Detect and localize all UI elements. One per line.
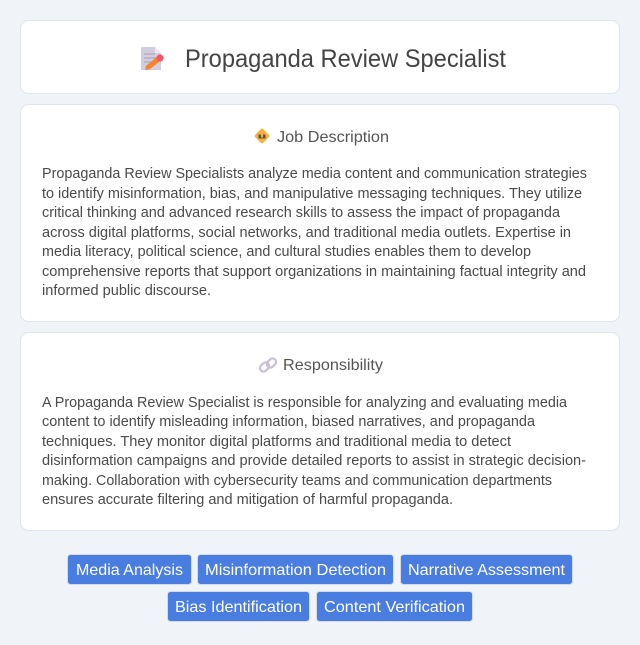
- text: job description body: Propaganda Review Specialists analyze media content and communication strategies: [42, 166, 587, 182]
- tag: narrative assessment: [400, 554, 572, 584]
- tag: content verification: Content Verification: [324, 599, 465, 616]
- text: responsibility body: techniques. They monitor digital platforms and traditional media to detect: [42, 434, 511, 450]
- text: job description body: [42, 166, 587, 299]
- tag: bias identification: [168, 592, 310, 622]
- tag: misinformation detection: Misinformation Detection: [205, 562, 386, 579]
- icon: document with pencil: [141, 47, 164, 70]
- skill tags: [68, 554, 572, 622]
- heading: responsibility: Responsibility: [283, 357, 383, 374]
- text: job description body: critical thinking and advanced research skills to assess the impact of propaganda: [42, 205, 560, 221]
- text: job description body: across digital platforms, social networks, and traditional media outlets. Expertise in: [42, 225, 571, 241]
- tag: media analysis: Media Analysis: [76, 562, 183, 579]
- text: responsibility body: A Propaganda Review Specialist is responsible for analyzing and evaluating media: [42, 395, 567, 411]
- text: job description body: media literacy, political science, and cultural studies enables them to develop: [42, 244, 531, 260]
- tag: bias identification: Bias Identification: [175, 599, 302, 616]
- text: job description body: informed public discourse.: [42, 283, 211, 299]
- text: responsibility body: [42, 395, 586, 508]
- tag: media analysis: [68, 554, 192, 584]
- heading: job description: Job Description: [277, 129, 389, 146]
- text: job description body: comprehensive reports that support organizations in maintaining factual integrity and: [42, 264, 586, 280]
- text: responsibility body: disinformation campaigns and provide detailed reports to assist in strategic decision-: [42, 453, 586, 469]
- tag: misinformation detection: [198, 554, 394, 584]
- panel: job description: [20, 104, 620, 322]
- panel: responsibility: [20, 332, 620, 530]
- tag: narrative assessment: Narrative Assessment: [408, 562, 566, 579]
- tag: content verification: [316, 592, 472, 622]
- panel: title: [20, 20, 620, 94]
- text: job description body: to identify misinformation, bias, and manipulative messaging techniques. They utilize: [42, 186, 582, 202]
- icon: chain link: [258, 357, 278, 373]
- text: responsibility body: making. Collaboration with cybersecurity teams and communication departments: [42, 473, 552, 489]
- title text: Propaganda Review Specialist: [185, 45, 506, 73]
- text: responsibility body: content to identify misleading information, biased narratives, and propaganda: [42, 414, 535, 430]
- text: responsibility body: ensures accurate filtering and mitigation of harmful propaganda.: [42, 492, 453, 508]
- icon: orange diamond: [254, 128, 270, 144]
